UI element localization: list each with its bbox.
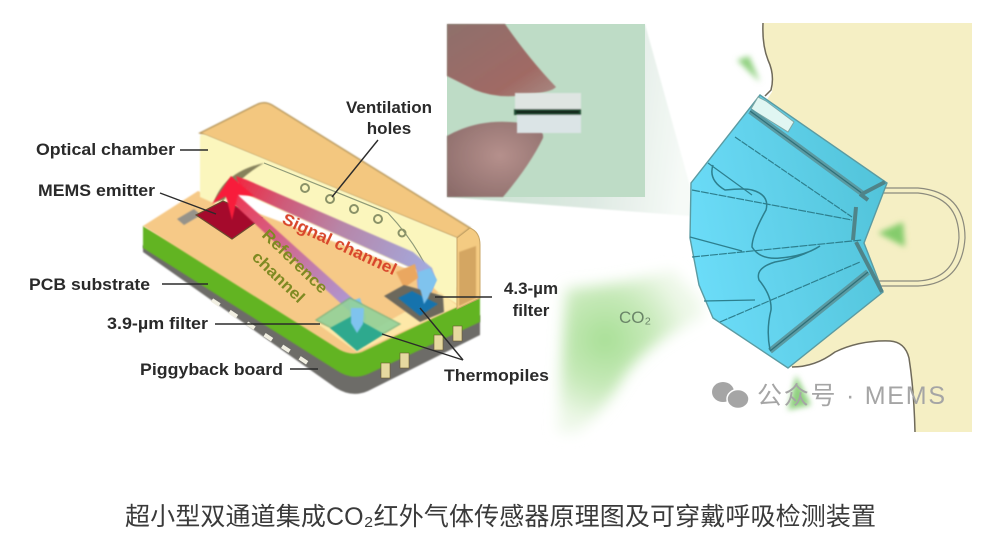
label: optical chamber: Optical chamber <box>36 140 175 159</box>
photo background <box>447 24 645 197</box>
chamber top surface <box>200 103 470 238</box>
3.9 micron filter glass <box>316 298 400 345</box>
label: 4.3 micron filter <box>504 279 558 320</box>
label: signal channel: Signal channel <box>279 210 399 279</box>
watermark: 公众号 · MEMS <box>757 382 945 410</box>
panel: sensor cross-section diagram <box>143 103 480 394</box>
pillar side shade <box>459 246 476 306</box>
face profile line <box>763 23 915 432</box>
surgical mask body <box>690 95 887 368</box>
signal thermopile blue face <box>398 291 438 316</box>
panel: face wearing mask <box>558 23 972 432</box>
label: 4.3 micron filter: filter <box>513 301 550 320</box>
exhaled CO2 cloud <box>558 270 702 432</box>
caption: 超小型双通道集成CO₂红外气体传感器原理图及可穿戴呼吸检测装置 <box>125 503 876 531</box>
MEMS emitter mount <box>177 209 201 225</box>
signal tail overlay <box>419 284 434 304</box>
solder pads right side <box>381 326 462 378</box>
label: PCB substrate: PCB substrate <box>29 275 150 294</box>
mask ear loop <box>876 188 965 286</box>
label: piggyback board: Piggyback board <box>140 360 283 379</box>
base top surface <box>143 191 480 354</box>
label: ventilation holes: holes <box>367 119 411 138</box>
signal channel beam <box>236 176 436 303</box>
4.3 micron filter block <box>396 264 418 288</box>
panel: photo of sensor held in fingers <box>447 24 645 197</box>
leader lines <box>160 140 492 369</box>
lower finger <box>447 122 543 197</box>
arch shadow <box>214 163 264 202</box>
MEMS emitter <box>196 201 262 239</box>
label: reference channel: Reference <box>258 227 331 297</box>
label: 3.9 micron filter: 3.9-µm filter <box>107 314 208 333</box>
ventilation holes <box>301 184 406 236</box>
icon: WeChat <box>712 382 749 408</box>
label: reference channel <box>248 227 331 307</box>
face background <box>700 23 972 432</box>
label: reference channel: channel <box>248 249 308 307</box>
chamber front wall <box>200 134 457 304</box>
chamber right pillar <box>457 228 480 309</box>
label: 4.3 micron filter: 4.3-µm <box>504 279 558 298</box>
exhale arrow: cheek <box>878 222 905 247</box>
mask side seams <box>853 182 885 292</box>
reference thermopile <box>330 316 384 351</box>
exhale arrow: chin <box>788 375 811 410</box>
cream floor rim <box>315 292 458 352</box>
label: MEMS emitter: MEMS emitter <box>38 181 155 200</box>
exhale arrow: nose <box>737 56 760 82</box>
mask nose strip <box>751 97 794 132</box>
reference channel beam <box>225 182 366 332</box>
label: ventilation holes: Ventilation <box>346 98 432 117</box>
label: ventilation holes <box>346 98 432 138</box>
inner cavity outline <box>264 163 432 280</box>
upper finger <box>447 24 556 96</box>
beam blue tails <box>349 268 437 333</box>
label: thermopiles: Thermopiles <box>444 366 549 385</box>
projection wedge from photo to mask <box>447 24 700 222</box>
sensor chip <box>514 93 581 133</box>
pads left side <box>212 300 312 366</box>
CO2 label: CO₂ <box>619 308 651 327</box>
reference tail overlay <box>351 308 364 333</box>
mask pleats <box>690 111 868 351</box>
PCB substrate layer <box>143 226 480 377</box>
piggyback board layer <box>143 245 480 394</box>
emitter light arrow <box>212 176 254 220</box>
signal thermopile <box>384 285 444 322</box>
